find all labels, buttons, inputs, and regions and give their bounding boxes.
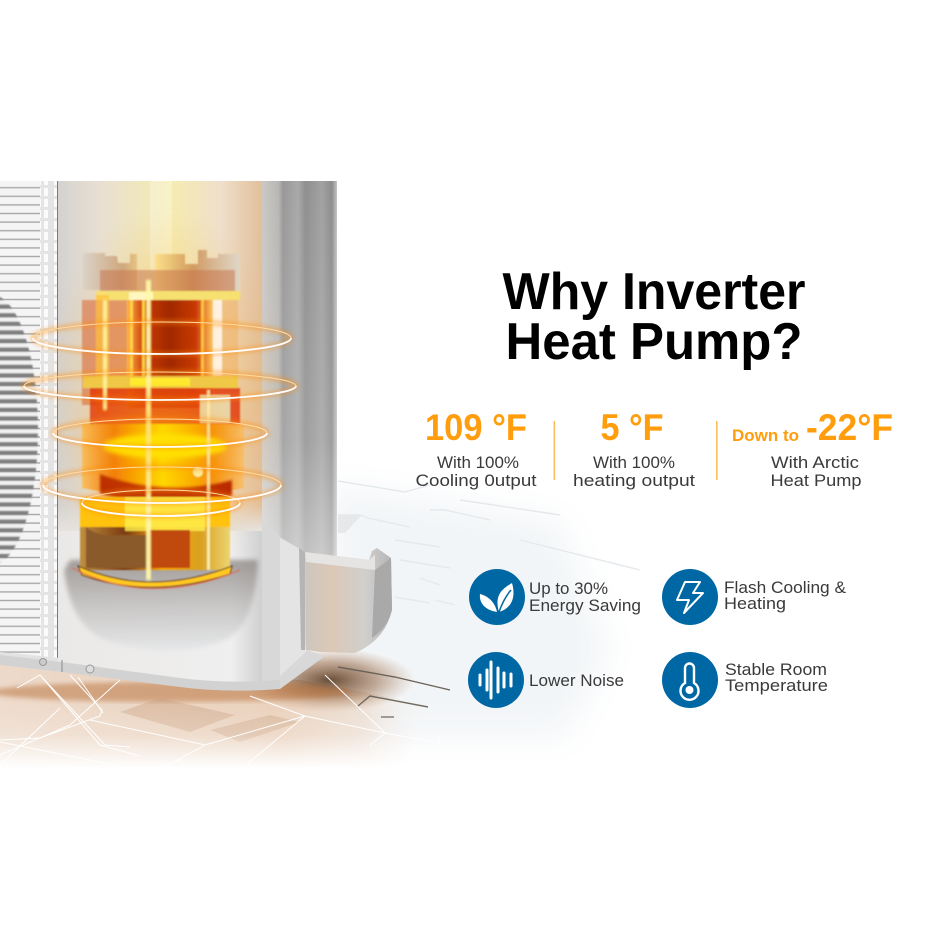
title: Heat Pump? (506, 313, 802, 371)
side stripes (262, 181, 337, 556)
floor: blueprint surface (0, 481, 925, 834)
title (502, 263, 806, 371)
stat: down to -22 F: -22°F (806, 407, 893, 448)
stat: 109 F cooling (416, 407, 537, 490)
feature: lower noise (468, 652, 624, 708)
stat: down to -22 F: Down to (732, 426, 799, 445)
feature: energy saving: Up to 30% (529, 579, 608, 598)
stat: down to -22 F: Heat Pump (770, 471, 862, 490)
front panel (58, 181, 262, 690)
upper bright flange (96, 291, 240, 300)
feature: stable temperature: Temperature (725, 676, 828, 695)
screw right (86, 665, 94, 673)
icon: sound wave (468, 652, 524, 708)
icon: thermometer (662, 652, 718, 708)
stat: 109 F cooling: 109 °F (425, 407, 527, 448)
central beam (146, 280, 151, 580)
icon: leaves (469, 569, 525, 625)
internal warm glow (47, 210, 283, 590)
side lower body (262, 520, 325, 689)
title: Why Inverter (502, 263, 806, 321)
hot glow around core (70, 370, 250, 510)
stat: 109 F cooling: Cooling 0utput (416, 471, 537, 490)
screw left (40, 658, 46, 666)
icon: lightning (662, 569, 718, 625)
stator top castellations (83, 250, 240, 295)
translucent base tub (64, 560, 258, 651)
stat: down to -22 F: With Arctic (771, 453, 860, 472)
feature: flash cooling: Heating (724, 594, 786, 613)
bottom front lip (0, 655, 280, 691)
stat: 109 F cooling: With 100% (437, 453, 519, 472)
lower rotor (90, 388, 240, 424)
feature: lower noise: Lower Noise (529, 671, 624, 690)
stat: 5 F heating: With 100% (593, 453, 675, 472)
heat pump outdoor unit (0, 181, 392, 691)
divider (716, 421, 718, 480)
stat: 5 F heating: 5 °F (600, 407, 664, 448)
heat rings (24, 322, 296, 516)
feature: flash cooling (662, 569, 847, 625)
stat: 5 F heating: heating output (573, 471, 695, 490)
feature: flash cooling: Flash Cooling & (724, 578, 847, 597)
copper coil (127, 300, 213, 408)
motor compressor core (72, 250, 244, 589)
service valve cover (299, 548, 392, 653)
feature: stable temperature (662, 652, 828, 708)
feature: stable temperature: Stable Room (725, 660, 827, 679)
compressor body (82, 424, 244, 496)
stat: 5 F heating (573, 407, 695, 490)
stat: down to -22 F (732, 407, 893, 490)
feature: energy saving: Energy Saving (529, 596, 641, 615)
vent column (40, 181, 57, 657)
feature: energy saving (469, 569, 641, 625)
left fin grille (0, 181, 40, 661)
lower rail of the grille side (0, 652, 60, 672)
divider (554, 421, 555, 480)
lower base ring (80, 515, 230, 570)
lower flange (83, 376, 238, 388)
